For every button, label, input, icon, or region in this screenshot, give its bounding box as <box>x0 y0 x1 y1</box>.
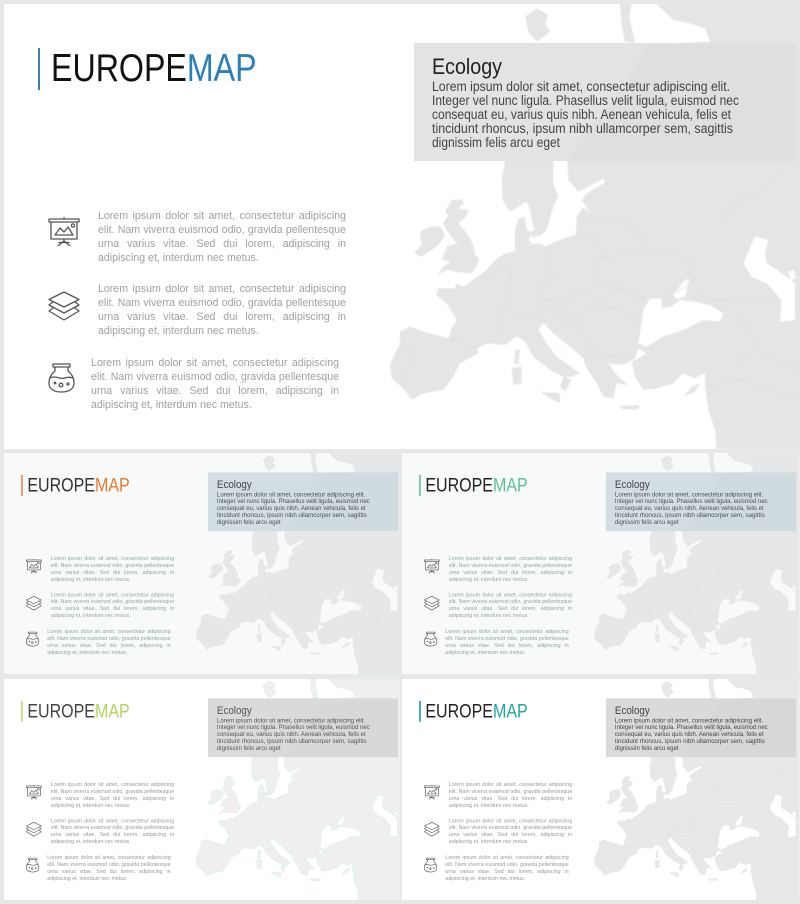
callout: Ecology: consequat eu, varius quis nibh. Aenean vehicula, felis et <box>615 505 764 512</box>
text block 3: elit. Nam viverra euismod odio, gravida pellentesque <box>91 371 339 383</box>
callout: Ecology: dignissim felis arcu eget <box>217 745 281 752</box>
map of Europe <box>594 453 800 674</box>
text block 1: urna varius vitae. Sed dui lorem, adipiscing in <box>449 795 572 801</box>
text block 3: adipiscing et, interdum nec metus. <box>47 876 127 881</box>
text block 2: Lorem ipsum dolor sit amet, consectetur adipiscing <box>449 818 572 824</box>
callout: Ecology: Integer vel nunc ligula. Phasellus velit ligula, euismod nec <box>615 498 768 505</box>
text block 3: urna varius vitae. Sed dui lorem, adipiscing in <box>91 385 339 397</box>
panel: orange variant <box>4 453 398 674</box>
icon: flask <box>26 858 40 872</box>
icon: presentation board <box>26 784 42 800</box>
text block 2: urna varius vitae. Sed dui lorem, adipiscing in <box>98 311 346 323</box>
text block 1: urna varius vitae. Sed dui lorem, adipiscing in <box>51 795 174 801</box>
text block 3: urna varius vitae. Sed dui lorem, adipiscing in <box>47 643 171 649</box>
text block 2 <box>51 592 174 619</box>
callout: Ecology: Lorem ipsum dolor sit amet, consectetur adipiscing elit. <box>615 717 763 724</box>
callout: Ecology: Lorem ipsum dolor sit amet, consectetur adipiscing elit. <box>432 79 730 94</box>
callout: Ecology <box>208 472 398 531</box>
text block 3: urna varius vitae. Sed dui lorem, adipiscing in <box>47 869 171 875</box>
text block 2 <box>51 818 174 845</box>
callout: Ecology: Integer vel nunc ligula. Phasellus velit ligula, euismod nec <box>217 724 370 731</box>
text block 1: urna varius vitae. Sed dui lorem, adipiscing in <box>449 569 572 575</box>
icon: flask <box>26 632 40 646</box>
text block 1: elit. Nam viverra euismod odio, gravida pellentesque <box>51 788 174 794</box>
icon: flask <box>424 858 437 873</box>
callout: Ecology: consequat eu, varius quis nibh. Aenean vehicula, felis et <box>432 107 731 122</box>
title: Europe Map: EUROPEMAP <box>425 474 528 496</box>
title: Europe Map: EUROPEMAP <box>425 700 528 722</box>
text block 1 <box>51 555 174 582</box>
text block 2: adipiscing et, interdum nec metus. <box>449 839 529 845</box>
icon: layers <box>48 291 80 321</box>
callout: Ecology: Integer vel nunc ligula. Phasellus velit ligula, euismod nec <box>217 498 370 505</box>
text block 2: Lorem ipsum dolor sit amet, consectetur adipiscing <box>51 818 174 824</box>
text block 3: Lorem ipsum dolor sit amet, consectetur adipiscing <box>445 855 569 861</box>
text block 1: elit. Nam viverra euismod odio, gravida pellentesque <box>51 562 174 568</box>
text block 3: Lorem ipsum dolor sit amet, consectetur adipiscing <box>47 629 171 635</box>
text block 2: urna varius vitae. Sed dui lorem, adipiscing in <box>449 832 572 838</box>
text block 1: adipiscing et, interdum nec metus. <box>98 252 259 264</box>
icon: presentation board <box>424 784 440 800</box>
text block 3: urna varius vitae. Sed dui lorem, adipiscing in <box>445 643 569 649</box>
icon: layers <box>26 596 42 610</box>
text block 2: Lorem ipsum dolor sit amet, consectetur adipiscing <box>449 592 572 598</box>
callout: Ecology: consequat eu, varius quis nibh. Aenean vehicula, felis et <box>217 505 366 512</box>
text block 1: Lorem ipsum dolor sit amet, consectetur adipiscing <box>98 210 346 222</box>
map of Europe <box>390 4 800 449</box>
callout: Ecology: Lorem ipsum dolor sit amet, consectetur adipiscing elit. <box>217 717 365 724</box>
title: Europe Map: EUROPEMAP <box>51 47 257 90</box>
text block 3: adipiscing et, interdum nec metus. <box>91 399 252 411</box>
text block 2: elit. Nam viverra euismod odio, gravida pellentesque <box>51 825 174 831</box>
text block 2: urna varius vitae. Sed dui lorem, adipiscing in <box>51 832 174 838</box>
text block 3 <box>445 854 569 882</box>
text block 3: Lorem ipsum dolor sit amet, consectetur adipiscing <box>445 629 569 635</box>
text block 3 <box>47 855 171 881</box>
text block 1: adipiscing et, interdum nec metus. <box>449 576 529 582</box>
text block 3 <box>91 357 339 411</box>
callout: Ecology: Ecology <box>217 705 252 717</box>
text block 2: Lorem ipsum dolor sit amet, consectetur adipiscing <box>98 283 346 295</box>
icon: presentation board <box>26 558 42 574</box>
callout: Ecology: Ecology <box>615 479 650 491</box>
title: Europe Map: EUROPEMAP <box>27 474 130 496</box>
text block 1 <box>51 781 174 808</box>
text block 3 <box>445 629 569 655</box>
callout: Ecology: Integer vel nunc ligula. Phasellus velit ligula, euismod nec <box>615 724 768 731</box>
text block 1: Lorem ipsum dolor sit amet, consectetur adipiscing <box>449 555 572 561</box>
text block 3: elit. Nam viverra euismod odio, gravida pellentesque <box>445 862 569 868</box>
callout: Ecology: consequat eu, varius quis nibh. Aenean vehicula, felis et <box>615 731 764 738</box>
text block 3: adipiscing et, interdum nec metus. <box>445 876 525 881</box>
panel: lime variant <box>4 679 400 900</box>
icon: layers <box>26 822 42 836</box>
text block 3: Lorem ipsum dolor sit amet, consectetur adipiscing <box>47 855 171 861</box>
panel: main slide <box>4 4 796 449</box>
text block 2: elit. Nam viverra euismod odio, gravida pellentesque <box>51 599 174 605</box>
icon: layers <box>424 596 440 610</box>
text block 2: elit. Nam viverra euismod odio, gravida pellentesque <box>98 297 346 309</box>
callout: Ecology: tincidunt rhoncus, ipsum nibh ullamcorper sem, sagittis <box>217 512 367 519</box>
text block 2: adipiscing et, interdum nec metus. <box>51 839 131 845</box>
callout: Ecology: Lorem ipsum dolor sit amet, consectetur adipiscing elit. <box>217 491 365 498</box>
text block 1: Lorem ipsum dolor sit amet, consectetur adipiscing <box>449 781 572 787</box>
text block 1: elit. Nam viverra euismod odio, gravida pellentesque <box>98 224 346 236</box>
map of Europe <box>594 679 800 900</box>
panel: green variant <box>402 453 800 674</box>
callout: Ecology <box>606 698 796 757</box>
text block 1 <box>449 555 572 582</box>
text block 2: elit. Nam viverra euismod odio, gravida pellentesque <box>449 825 572 831</box>
text block 2 <box>98 283 346 337</box>
text block 2 <box>449 592 572 619</box>
callout: Ecology: tincidunt rhoncus, ipsum nibh ullamcorper sem, sagittis <box>615 738 765 745</box>
text block 3: adipiscing et, interdum nec metus. <box>47 650 127 655</box>
text block 3 <box>47 629 171 655</box>
icon: flask <box>48 363 75 393</box>
text block 1: urna varius vitae. Sed dui lorem, adipiscing in <box>51 569 174 575</box>
title: Europe Map: EUROPEMAP <box>27 700 130 722</box>
text block 3: elit. Nam viverra euismod odio, gravida pellentesque <box>47 862 171 868</box>
text block 2: Lorem ipsum dolor sit amet, consectetur adipiscing <box>51 592 174 598</box>
callout: Ecology: tincidunt rhoncus, ipsum nibh ullamcorper sem, sagittis <box>217 738 367 745</box>
text block 2: adipiscing et, interdum nec metus. <box>51 613 131 619</box>
map of Europe <box>196 453 400 674</box>
text block 3: adipiscing et, interdum nec metus. <box>445 650 525 655</box>
text block 3: elit. Nam viverra euismod odio, gravida pellentesque <box>445 636 569 642</box>
text block 1 <box>449 781 572 809</box>
callout: Ecology: Ecology <box>217 479 252 491</box>
text block 1 <box>98 210 346 264</box>
panel: teal variant <box>402 679 800 900</box>
text block 1: Lorem ipsum dolor sit amet, consectetur adipiscing <box>51 555 174 561</box>
text block 1: Lorem ipsum dolor sit amet, consectetur adipiscing <box>51 781 174 787</box>
text block 1: urna varius vitae. Sed dui lorem, adipiscing in <box>98 238 346 250</box>
callout: Ecology: dignissim felis arcu eget <box>432 135 560 150</box>
callout: Ecology: tincidunt rhoncus, ipsum nibh ullamcorper sem, sagittis <box>432 121 733 136</box>
text block 3: Lorem ipsum dolor sit amet, consectetur adipiscing <box>91 357 339 369</box>
callout: Ecology: Ecology <box>615 705 650 717</box>
text block 2: adipiscing et, interdum nec metus. <box>449 613 529 619</box>
text block 1: adipiscing et, interdum nec metus. <box>51 576 131 582</box>
text block 3: elit. Nam viverra euismod odio, gravida pellentesque <box>47 636 171 642</box>
callout: Ecology: dignissim felis arcu eget <box>615 519 679 526</box>
callout: Ecology: dignissim felis arcu eget <box>217 519 281 526</box>
text block 1: elit. Nam viverra euismod odio, gravida pellentesque <box>449 562 572 568</box>
callout: Ecology: tincidunt rhoncus, ipsum nibh ullamcorper sem, sagittis <box>615 512 765 519</box>
text block 2: elit. Nam viverra euismod odio, gravida pellentesque <box>449 599 572 605</box>
callout: Ecology: Integer vel nunc ligula. Phasellus velit ligula, euismod nec <box>432 93 739 108</box>
icon: flask <box>424 632 438 646</box>
text block 1: elit. Nam viverra euismod odio, gravida pellentesque <box>449 788 572 794</box>
text block 1: adipiscing et, interdum nec metus. <box>51 802 131 808</box>
text block 3: urna varius vitae. Sed dui lorem, adipiscing in <box>445 869 569 875</box>
text block 2: adipiscing et, interdum nec metus. <box>98 325 259 337</box>
callout: Ecology <box>414 43 796 161</box>
icon: presentation board <box>424 558 440 574</box>
icon: presentation board <box>48 216 80 246</box>
text block 1: adipiscing et, interdum nec metus. <box>449 802 529 808</box>
callout: Ecology: dignissim felis arcu eget <box>615 745 679 752</box>
callout: Ecology <box>208 698 398 757</box>
text block 2 <box>449 817 572 845</box>
callout: Ecology <box>606 472 796 531</box>
callout: Ecology: Lorem ipsum dolor sit amet, consectetur adipiscing elit. <box>615 491 763 498</box>
callout: Ecology: Ecology <box>432 54 502 79</box>
text block 2: urna varius vitae. Sed dui lorem, adipiscing in <box>449 606 572 612</box>
text block 2: urna varius vitae. Sed dui lorem, adipiscing in <box>51 606 174 612</box>
map of Europe <box>196 679 400 900</box>
icon: layers <box>424 822 440 837</box>
callout: Ecology: consequat eu, varius quis nibh. Aenean vehicula, felis et <box>217 731 366 738</box>
